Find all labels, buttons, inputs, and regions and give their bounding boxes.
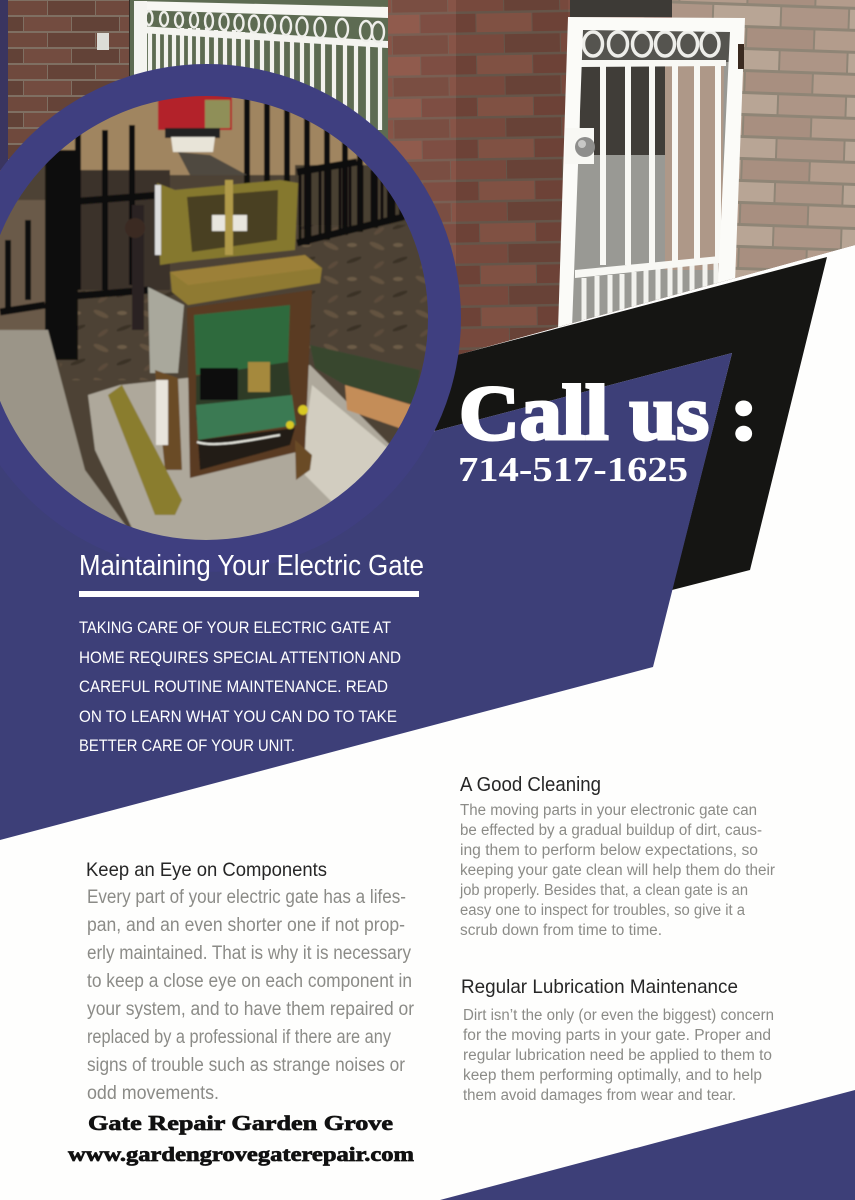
section: a good cleaning: scrub down from time to time. bbox=[460, 922, 662, 939]
section: a good cleaning: ing them to perform below expectations, so bbox=[460, 842, 758, 859]
section: a good cleaning bbox=[459, 774, 775, 939]
title underline bbox=[79, 591, 419, 597]
black angled panel bbox=[400, 257, 827, 590]
section: regular lubrication maintenance bbox=[461, 976, 774, 1104]
bottom right blue corner bbox=[440, 1090, 855, 1200]
white fence bbox=[130, 0, 390, 140]
company name: Gate Repair Garden Grove bbox=[88, 1111, 393, 1135]
section: keep an eye on components bbox=[86, 859, 415, 1104]
intro paragraph: HOME REQUIRES SPECIAL ATTENTION AND bbox=[79, 648, 401, 667]
section: keep an eye on components: signs of trouble such as strange noises or bbox=[87, 1055, 406, 1076]
call us heading: Call us : bbox=[459, 369, 758, 456]
right brick wall bbox=[672, 0, 855, 300]
intro paragraph: TAKING CARE OF YOUR ELECTRIC GATE AT bbox=[79, 618, 391, 637]
white pedestrian gate bbox=[558, 0, 745, 330]
intro paragraph: ON TO LEARN WHAT YOU CAN DO TO TAKE bbox=[79, 707, 397, 726]
section: a good cleaning: be effected by a gradual buildup of dirt, caus- bbox=[460, 822, 762, 839]
section: keep an eye on components: Keep an Eye on Components bbox=[86, 859, 327, 881]
section: a good cleaning: A Good Cleaning bbox=[460, 774, 601, 796]
section: keep an eye on components: odd movements. bbox=[87, 1083, 219, 1104]
section: a good cleaning: easy one to inspect for troubles, so give it a bbox=[460, 902, 745, 919]
section: regular lubrication maintenance: regular lubrication need be applied to them to bbox=[463, 1047, 772, 1064]
section: regular lubrication maintenance: Regular Lubrication Maintenance bbox=[461, 976, 738, 998]
section: keep an eye on components: pan, and an even shorter one if not prop- bbox=[87, 915, 405, 936]
website: www.gardengrovegaterepair.com bbox=[68, 1144, 414, 1166]
phone number: 714-517-1625 bbox=[458, 450, 688, 489]
center brick pillar shading bbox=[388, 0, 568, 360]
intro paragraph: BETTER CARE OF YOUR UNIT. bbox=[79, 736, 295, 755]
section: keep an eye on components: Every part of your electric gate has a lifes- bbox=[87, 887, 406, 908]
section: keep an eye on components: replaced by a professional if there are any bbox=[87, 1027, 391, 1048]
section: regular lubrication maintenance: keep them performing optimally, and to help bbox=[463, 1067, 762, 1084]
section: keep an eye on components: to keep a close eye on each component in bbox=[87, 971, 412, 992]
circular photo: electric gate operator bbox=[0, 90, 440, 550]
section: a good cleaning: The moving parts in your electronic gate can bbox=[460, 802, 757, 819]
section: keep an eye on components: your system, and to have them repaired or bbox=[87, 999, 415, 1020]
section: regular lubrication maintenance: for the moving parts in your gate. Proper and bbox=[463, 1027, 771, 1044]
intro paragraph bbox=[79, 618, 401, 755]
section: keep an eye on components: erly maintained. That is why it is necessary bbox=[87, 943, 411, 964]
section: regular lubrication maintenance: Dirt isn’t the only (or even the biggest) concern bbox=[463, 1007, 774, 1024]
blue angled panel bbox=[0, 353, 732, 840]
concrete and grass bbox=[0, 330, 420, 545]
section: regular lubrication maintenance: them avoid damages from wear and tear. bbox=[463, 1087, 736, 1104]
blue circle ring bbox=[0, 64, 461, 572]
intro paragraph: CAREFUL ROUTINE MAINTENANCE. READ bbox=[79, 677, 388, 696]
header photo: brick pillars and white gates bbox=[0, 0, 855, 360]
iron fence bbox=[0, 95, 403, 360]
section: a good cleaning: keeping your gate clean will help them do their bbox=[460, 862, 775, 879]
title: Maintaining Your Electric Gate bbox=[79, 550, 424, 582]
section: a good cleaning: job properly. Besides that, a clean gate is an bbox=[459, 882, 748, 899]
operator unit bbox=[108, 90, 322, 515]
left brick wall bbox=[0, 0, 130, 170]
